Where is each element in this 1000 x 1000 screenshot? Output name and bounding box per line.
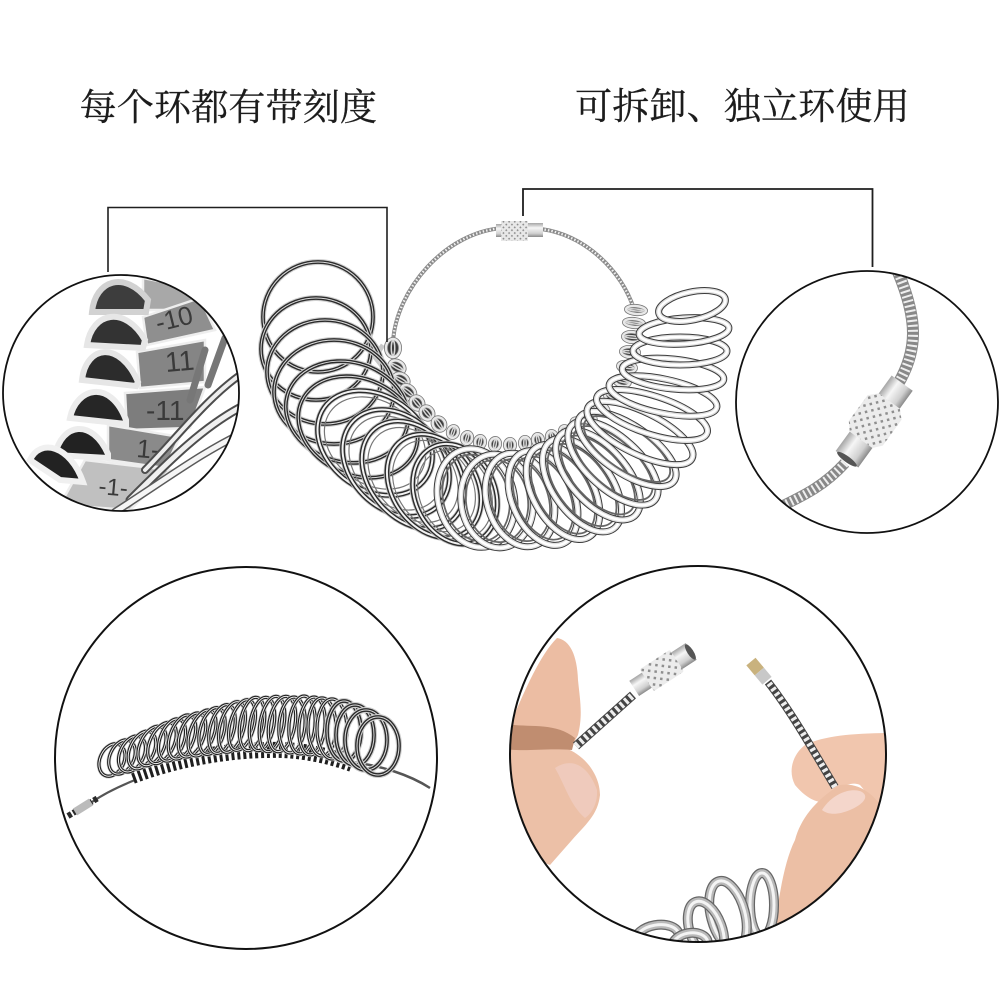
eyelet band xyxy=(132,750,352,776)
connector line: right callout xyxy=(523,189,872,267)
circle outline xyxy=(736,271,998,533)
right thick rings xyxy=(455,285,730,556)
engraved tabs xyxy=(60,278,215,510)
engraved numbers: -1- xyxy=(97,473,129,503)
product: ring sizer set on cable xyxy=(261,221,730,558)
cable loop xyxy=(393,228,635,342)
left finger crease xyxy=(511,725,575,750)
small eyelets with size tabs xyxy=(370,305,646,451)
side-view rings xyxy=(94,694,399,780)
title: graduated rings: 每个环都有带刻度 xyxy=(80,87,377,129)
cable lock xyxy=(496,221,543,241)
engraved numbers: 11 xyxy=(164,345,195,378)
cable and locks xyxy=(68,762,430,816)
engraved numbers: 1- xyxy=(135,433,161,465)
right thumb xyxy=(775,785,885,925)
left lock xyxy=(627,639,700,699)
circle: side view of ring set xyxy=(55,567,437,949)
tab eyelets xyxy=(30,282,148,482)
cable lock close-up xyxy=(828,371,919,474)
twisted cable xyxy=(898,272,913,384)
detail circle: engraved size numbers xyxy=(3,275,245,512)
right upper finger xyxy=(792,733,885,802)
lower rings xyxy=(634,868,779,941)
right cable tip xyxy=(746,658,772,685)
thumb nail xyxy=(555,763,597,818)
detail circle: cable lock xyxy=(736,271,998,533)
circle outline xyxy=(3,275,239,511)
left cable xyxy=(576,695,633,746)
circle: fingers opening the cable xyxy=(505,566,895,964)
engraved numbers xyxy=(100,306,194,496)
left index finger xyxy=(513,638,581,750)
left thumb xyxy=(505,748,600,865)
circle outline xyxy=(510,566,886,942)
engraved numbers: -10 xyxy=(152,300,196,338)
right cable xyxy=(768,682,835,787)
left large rings xyxy=(261,262,526,558)
engraved numbers: -11 xyxy=(146,395,184,426)
connector line: left callout xyxy=(108,208,387,342)
right thumb nail xyxy=(822,790,865,814)
title: detachable rings: 可拆卸、独立环使用 xyxy=(575,86,910,128)
curved ring bands xyxy=(115,338,245,512)
